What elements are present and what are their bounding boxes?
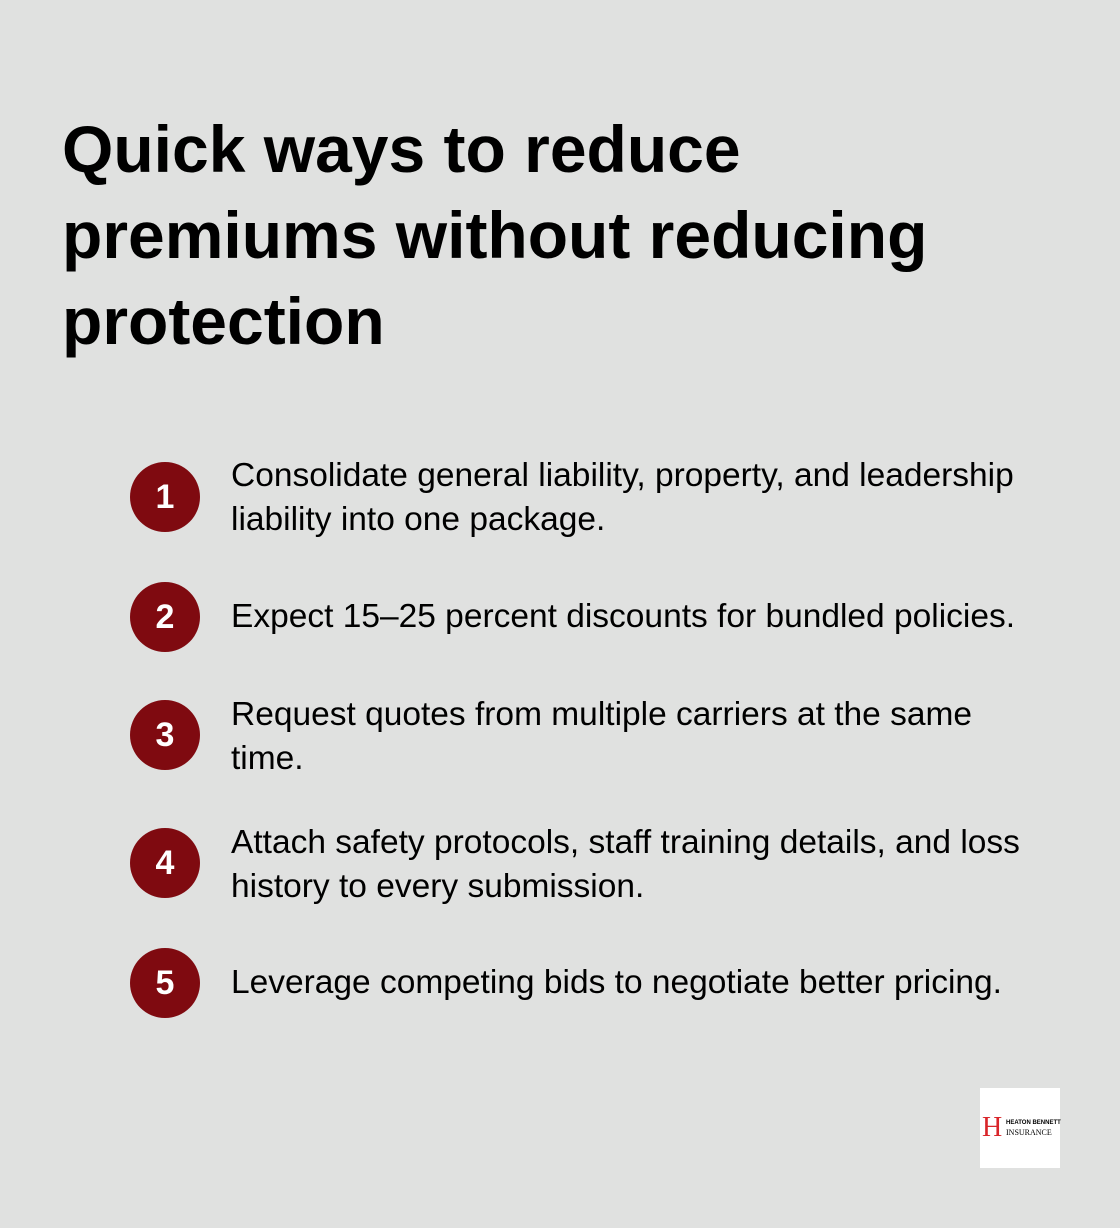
item 4: 4 [156, 844, 174, 882]
item 1: 1 [156, 478, 174, 516]
item 3: 3 [156, 716, 174, 754]
title: Quick ways to reduce premiums without reducing protection [62, 112, 927, 358]
logo: H [982, 1112, 1002, 1143]
logo [980, 1088, 1060, 1168]
item 5 [130, 948, 1002, 1018]
item 3: Request quotes from multiple carriers at the same time. [231, 696, 972, 777]
item 5: 5 [156, 964, 174, 1002]
logo: INSURANCE [1006, 1128, 1052, 1137]
item 4: Attach safety protocols, staff training details, and loss history to every submission. [231, 824, 1020, 905]
logo: HEATON BENNETT [1006, 1120, 1061, 1126]
item 1: Consolidate general liability, property, and leadership liability into one package. [231, 457, 1014, 538]
item 2: 2 [156, 598, 174, 636]
item 2: Expect 15–25 percent discounts for bundled policies. [231, 598, 1015, 635]
item 2 [130, 582, 1015, 652]
item 5: Leverage competing bids to negotiate better pricing. [231, 964, 1002, 1001]
